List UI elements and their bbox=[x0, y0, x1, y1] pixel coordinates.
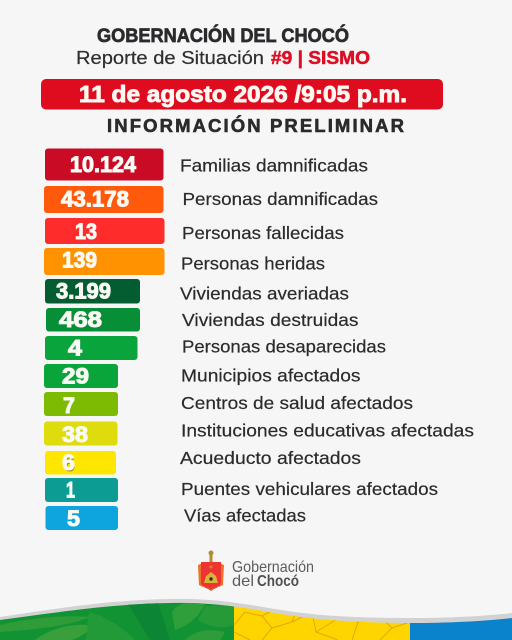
date banner: 11 de agosto 2026 /9:05 p.m. bbox=[79, 81, 407, 107]
row: municipios afectados: Municipios afectados bbox=[181, 366, 361, 386]
logo: Gobernación del Chocó bbox=[198, 550, 314, 591]
row: familias damnificadas: Familias damnificadas bbox=[180, 156, 368, 176]
row: familias damnificadas: 10.124 bbox=[70, 152, 137, 177]
footer band: yellow cracked earth bbox=[234, 606, 410, 640]
row: personas heridas bbox=[44, 248, 325, 275]
row: centros de salud afectados bbox=[44, 392, 413, 418]
subtitle: Reporte de Situación bbox=[76, 47, 264, 68]
date banner bbox=[41, 79, 443, 110]
row: personas fallecidas bbox=[45, 218, 344, 244]
row: municipios afectados: 29 bbox=[62, 364, 89, 388]
footer band: blue bbox=[410, 618, 512, 640]
subtitle: #9 | SISMO bbox=[271, 48, 370, 68]
section heading: INFORMACIÓN PRELIMINAR bbox=[107, 115, 404, 136]
row: acueducto afectados: 6 bbox=[62, 450, 75, 475]
row: personas heridas: Personas heridas bbox=[181, 254, 325, 274]
subtitle bbox=[76, 47, 370, 68]
row: viviendas destruidas: 468 bbox=[59, 307, 102, 332]
row: personas damnificadas bbox=[44, 186, 378, 213]
row: acueducto afectados: Acueducto afectados bbox=[180, 448, 361, 468]
row: viviendas averiadas: Viviendas averiadas bbox=[180, 284, 349, 304]
logo: Gobernación del Chocó: Chocó bbox=[257, 573, 299, 590]
row: vías afectadas: Vías afectadas bbox=[184, 506, 306, 526]
row: personas desaparecidas bbox=[45, 336, 386, 360]
row: acueducto afectados bbox=[45, 448, 361, 476]
row: vías afectadas: 5 bbox=[67, 506, 80, 531]
row: acueducto afectados: 6 bbox=[64, 452, 76, 476]
row: personas desaparecidas: 4 bbox=[68, 336, 83, 360]
row: instituciones educativas afectadas: Instituciones educativas afectadas bbox=[181, 420, 474, 440]
row: viviendas averiadas: 3.199 bbox=[56, 278, 111, 304]
row: centros de salud afectados: 7 bbox=[63, 393, 75, 418]
row: vías afectadas bbox=[46, 506, 306, 531]
logo: Gobernación del Chocó: del bbox=[232, 573, 254, 590]
row: familias damnificadas bbox=[45, 148, 368, 180]
row: puentes vehiculares afectados: Puentes vehiculares afectados bbox=[181, 479, 438, 499]
row: personas damnificadas: Personas damnificadas bbox=[182, 189, 378, 209]
row: viviendas destruidas bbox=[46, 307, 359, 332]
row: centros de salud afectados: Centros de salud afectados bbox=[181, 393, 413, 413]
row: puentes vehiculares afectados bbox=[45, 478, 438, 502]
row: municipios afectados bbox=[44, 364, 361, 388]
footer band: green leaves bbox=[0, 602, 234, 640]
row: instituciones educativas afectadas bbox=[44, 420, 474, 447]
logo: Gobernación del Chocó: Gobernación bbox=[232, 559, 314, 576]
row: personas fallecidas: Personas fallecidas bbox=[182, 223, 344, 243]
row: personas damnificadas: 43.178 bbox=[61, 186, 129, 212]
footer wave bbox=[0, 595, 512, 640]
row: puentes vehiculares afectados: 1 bbox=[66, 478, 75, 502]
icon: coat of arms bbox=[198, 550, 224, 591]
row: personas desaparecidas: Personas desaparecidas bbox=[182, 336, 386, 356]
title: GOBERNACIÓN DEL CHOCÓ bbox=[97, 25, 349, 47]
row: viviendas averiadas bbox=[45, 278, 349, 304]
row: personas heridas: 139 bbox=[62, 248, 97, 272]
row: viviendas destruidas: Viviendas destruidas bbox=[182, 310, 359, 330]
row: personas fallecidas: 13 bbox=[75, 219, 97, 244]
row: instituciones educativas afectadas: 38 bbox=[62, 422, 88, 447]
